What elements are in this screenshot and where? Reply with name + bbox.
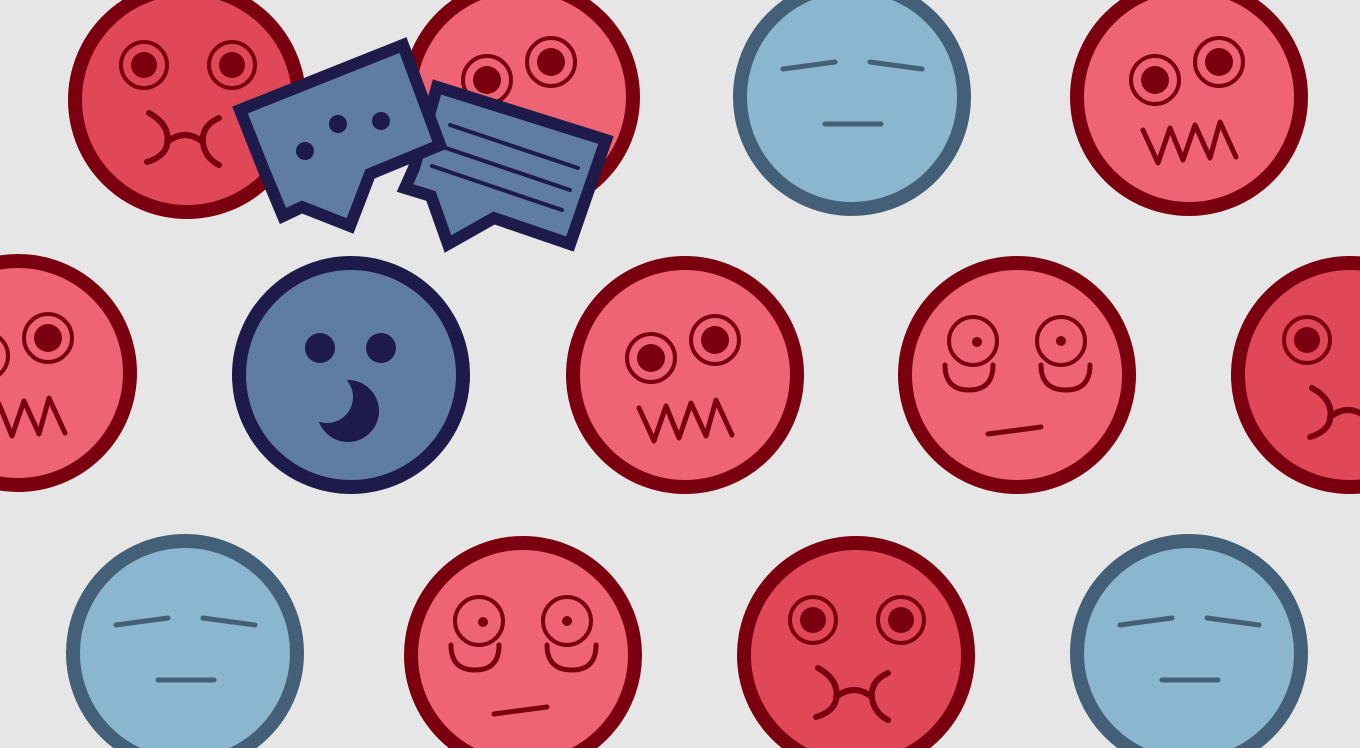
face 5 xyxy=(0,261,130,485)
speech bubbles xyxy=(240,45,606,244)
face 6: surprised blue xyxy=(239,263,463,487)
face 3 xyxy=(740,0,964,209)
bubble 2: lines xyxy=(405,87,606,244)
face 1 xyxy=(75,0,299,212)
face 2 xyxy=(409,0,633,209)
face 9 xyxy=(1238,263,1360,487)
face 12 xyxy=(744,543,968,748)
face 7 xyxy=(573,263,797,487)
bubble 1: dots xyxy=(240,45,440,226)
face 10 xyxy=(73,541,297,748)
face 13 xyxy=(1077,541,1301,748)
face 4 xyxy=(1077,0,1301,209)
face 11 xyxy=(411,543,635,748)
face 8 xyxy=(905,263,1129,487)
